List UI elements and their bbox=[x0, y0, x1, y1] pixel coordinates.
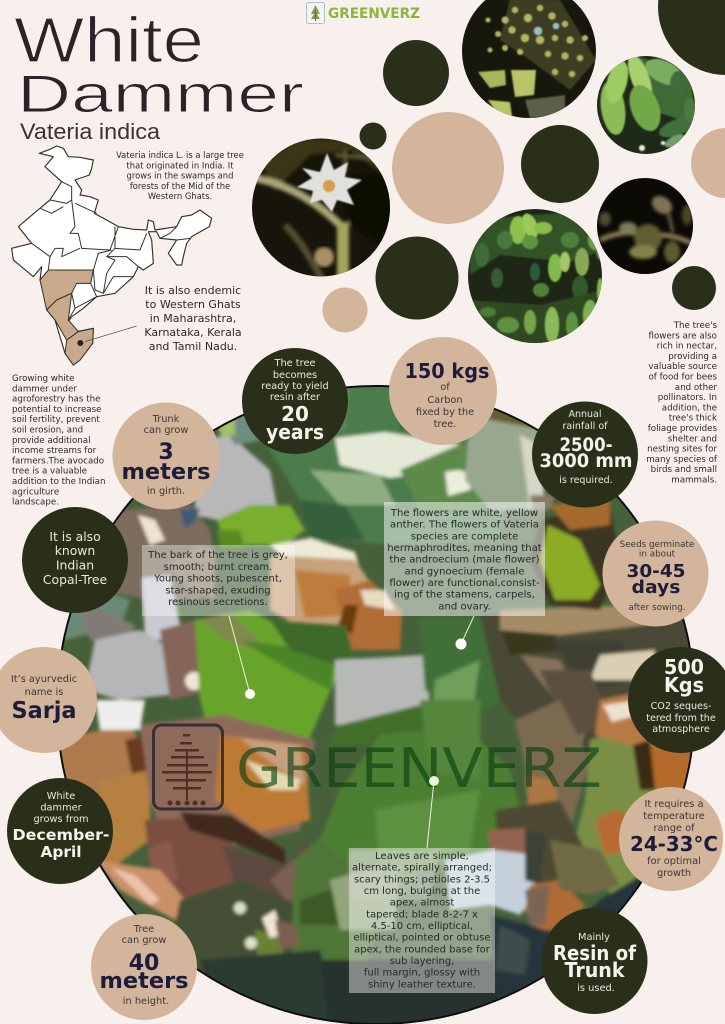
text box: leaves: full margin, glossy with bbox=[364, 968, 480, 979]
callout: flowering season: dammer bbox=[40, 802, 83, 814]
map: location pointer bbox=[77, 326, 137, 346]
watermark logo: tree bbox=[154, 725, 222, 809]
text box: flowers: ing of the stamens, carpels, bbox=[394, 590, 535, 601]
left paragraph: agroforestry has the bbox=[12, 395, 100, 405]
text box: leaves: shiny leather texture. bbox=[368, 979, 476, 990]
callout: Indian Copal-Tree: It is also bbox=[49, 529, 101, 544]
callout: 150 kgs: of bbox=[440, 382, 450, 393]
callout: 3 meters: in girth. bbox=[147, 486, 185, 497]
bright leaf top bbox=[217, 505, 305, 545]
logo: Greenverz bbox=[306, 2, 420, 24]
callout: seeds germinate: days bbox=[632, 577, 680, 598]
right paragraph: birds and small bbox=[651, 465, 717, 475]
text box: bark: resinous secretions. bbox=[168, 597, 268, 608]
text box: flowers: and ovary. bbox=[438, 601, 491, 612]
callout: 500 kgs: atmosphere bbox=[652, 724, 710, 735]
callout: resin of trunk: Resin of bbox=[553, 941, 636, 965]
photo: guava-like leaves bbox=[597, 56, 695, 154]
callout: temperature: growth bbox=[657, 868, 691, 879]
watermark text: GREENVERZ bbox=[236, 737, 602, 800]
intro text: that originated in India. It bbox=[126, 160, 234, 170]
text box: leaves bbox=[349, 776, 495, 993]
callout: Indian Copal-Tree: Copal-Tree bbox=[43, 572, 107, 587]
centre green bbox=[320, 725, 520, 870]
left paragraph: tree is a valuable bbox=[12, 467, 87, 477]
callout: rainfall: rainfall of bbox=[562, 421, 608, 432]
text box: flowers: flower) are functional,consist- bbox=[389, 578, 540, 589]
left paragraph: dammer under bbox=[12, 384, 77, 394]
right paragraph: valuable source bbox=[648, 362, 717, 372]
lower left browns bbox=[61, 728, 138, 796]
callout: temperature bbox=[619, 787, 723, 891]
callout: 40 meters: in height. bbox=[123, 996, 169, 1007]
intro text: forests of the Mid of the bbox=[130, 181, 230, 191]
callout: flowering season: grows from bbox=[33, 814, 89, 825]
right paragraph: pollinators. In bbox=[658, 393, 717, 403]
text box: bark: smooth; burnt cream. bbox=[164, 562, 272, 573]
text box: bark: star-shaped, exuding bbox=[165, 586, 271, 596]
callout: 40 meters: meters bbox=[100, 969, 188, 994]
intro text bbox=[116, 150, 244, 201]
callout: 20 years: ready to yield bbox=[261, 381, 329, 392]
right paragraph: mammals. bbox=[671, 476, 717, 486]
top area bbox=[268, 387, 504, 545]
text box: flowers bbox=[384, 502, 545, 650]
left paragraph: farmers.The avocado bbox=[12, 456, 104, 466]
text box: bark bbox=[142, 545, 295, 699]
left paragraph: potential to increase bbox=[12, 405, 102, 415]
callout: temperature: It requires a bbox=[645, 799, 703, 810]
intro text: Western Ghats. bbox=[148, 191, 212, 201]
right twigs bbox=[480, 615, 689, 754]
right paragraph: rich in nectar, bbox=[657, 342, 717, 352]
endemic note: Karnataka, Kerala bbox=[144, 326, 242, 339]
left paragraph: income streams for bbox=[12, 446, 97, 456]
text box: leaves: 4.5-10 cm, elliptical, bbox=[371, 921, 473, 932]
text box: flowers: The flowers are white, yellow bbox=[390, 508, 538, 519]
cream and brown bbox=[270, 538, 360, 570]
logo: Greenverz: GREENVERZ bbox=[328, 6, 420, 22]
callout: rainfall: is required. bbox=[559, 475, 613, 486]
callout: 3 meters: Trunk bbox=[152, 414, 180, 425]
central left leaf bbox=[193, 609, 337, 740]
right paragraph: addition, the bbox=[662, 403, 717, 413]
text box: leaves: sub layering, bbox=[390, 956, 454, 967]
left paragraph: addition to the Indian bbox=[12, 477, 106, 487]
callout: resin of trunk: Trunk bbox=[564, 958, 625, 982]
subtitle: Vateria indica bbox=[20, 119, 161, 144]
lower-left grey and taupe bbox=[142, 575, 180, 640]
left paragraph: provide additional bbox=[12, 436, 91, 446]
left paragraph: landscape. bbox=[12, 498, 59, 508]
callout: ayurvedic name bbox=[0, 647, 97, 753]
callout: 20 years bbox=[242, 348, 348, 454]
map of India bbox=[12, 146, 212, 365]
text box: leaves: apex, almost bbox=[390, 898, 454, 909]
callout: rainfall: 3000 mm bbox=[540, 450, 632, 472]
left paragraph bbox=[12, 374, 106, 508]
photo: green tree foliage bbox=[466, 207, 604, 345]
callout: seeds germinate bbox=[602, 520, 708, 626]
photo: white flower bbox=[250, 138, 392, 280]
callout: rainfall: 2500- bbox=[560, 434, 612, 456]
bottom dark bbox=[170, 880, 350, 1024]
text box: flowers: species are complete bbox=[411, 531, 518, 542]
callout: resin of trunk: Mainly bbox=[578, 932, 610, 943]
callout: seeds germinate: Seeds germinate bbox=[620, 540, 694, 550]
text box: flowers: anther. The flowers of Vateria bbox=[390, 520, 539, 531]
callout: temperature: range of bbox=[653, 823, 695, 834]
left paragraph: soil fertility, prevent bbox=[12, 415, 100, 425]
intro text: grows in the swamps and bbox=[127, 170, 233, 180]
callout: 40 meters: 40 bbox=[129, 951, 159, 976]
callout: 3 meters: can grow bbox=[144, 425, 188, 436]
callout: 3 meters bbox=[112, 402, 220, 510]
callout: 20 years: becomes bbox=[273, 370, 317, 381]
right paragraph: many species of bbox=[646, 455, 718, 465]
callout: 20 years: 20 bbox=[281, 402, 309, 426]
right paragraph bbox=[646, 321, 718, 486]
text box: leaves: cm long, bulging at the bbox=[364, 886, 480, 897]
right paragraph: and other bbox=[675, 383, 717, 393]
endemic note: and Tamil Nadu. bbox=[149, 340, 237, 353]
callout: temperature: 24-33°C bbox=[630, 832, 718, 856]
left paragraph: soil erosion, and bbox=[12, 426, 83, 436]
callout: 40 meters: can grow bbox=[122, 935, 166, 946]
callout: rainfall bbox=[532, 402, 638, 508]
right paragraph: providing a bbox=[668, 352, 717, 362]
callout: 500 kgs: tered from the bbox=[646, 713, 716, 724]
callout: resin of trunk bbox=[542, 908, 648, 1014]
callout: 500 kgs bbox=[628, 647, 725, 753]
right paragraph: tree's thick bbox=[669, 414, 717, 424]
text box: flowers: and gynoecium (female bbox=[405, 566, 524, 577]
map: highlighted southern states bbox=[40, 270, 93, 365]
text box: flowers: hermaphrodites, meaning that bbox=[387, 543, 542, 554]
title bbox=[14, 4, 304, 124]
callout: Indian Copal-Tree bbox=[22, 507, 128, 613]
endemic note bbox=[144, 284, 242, 353]
callout: ayurvedic name: Sarja bbox=[12, 698, 76, 724]
pointer: flowers bbox=[456, 616, 474, 650]
right paragraph: The tree's bbox=[673, 321, 717, 331]
text box: leaves: apex, the rounded base for bbox=[354, 944, 491, 955]
right lower bbox=[515, 700, 590, 830]
callout: Indian Copal-Tree: known bbox=[55, 543, 95, 558]
callout: Indian Copal-Tree: Indian bbox=[56, 558, 94, 572]
main circular leaf image bbox=[50, 380, 710, 1024]
callout: flowering season bbox=[7, 778, 113, 884]
callout: temperature: for optimal bbox=[647, 856, 701, 867]
left paragraph: agriculture bbox=[12, 487, 59, 497]
text box: leaves: scary things; petioles 2-3.5 bbox=[354, 874, 490, 885]
photo: sunlit foliage bbox=[460, 0, 600, 122]
pointer: leaves bbox=[427, 776, 439, 848]
right lime & brown bbox=[530, 505, 620, 610]
callout: 40 meters: Tree bbox=[133, 924, 154, 935]
right paragraph: foliage provides bbox=[648, 424, 717, 434]
intro text: Vateria indica L. is a large tree bbox=[116, 150, 244, 160]
grey upper left bbox=[195, 435, 278, 525]
callout: resin of trunk: is used. bbox=[577, 983, 615, 994]
title: White bbox=[14, 4, 204, 76]
callout: 500 kgs: CO2 seques- bbox=[651, 701, 711, 712]
endemic note: to Western Ghats bbox=[145, 298, 241, 311]
title: Dammer bbox=[17, 65, 304, 124]
callout: flowering season: White bbox=[47, 791, 75, 802]
text box: leaves: tapered; blade 8-2-7 x bbox=[366, 909, 478, 920]
text box: leaves: alternate, spirally arranged; bbox=[352, 863, 492, 874]
endemic note: It is also endemic bbox=[145, 284, 241, 297]
callout: 20 years: resin after bbox=[270, 392, 321, 403]
callout: 150 kgs: fixed by the bbox=[416, 407, 474, 418]
callout: 40 meters bbox=[91, 914, 197, 1020]
endemic note: in Maharashtra, bbox=[150, 312, 236, 325]
callout: 3 meters: meters bbox=[122, 460, 210, 485]
pointer: bark bbox=[229, 616, 255, 699]
callout: seeds germinate: 30-45 bbox=[626, 561, 686, 582]
callout: 20 years: years bbox=[266, 420, 324, 444]
callout: seeds germinate: in about bbox=[639, 550, 676, 560]
photo: flower buds bbox=[595, 176, 697, 276]
callout: 3 meters: 3 bbox=[158, 440, 174, 465]
callout: 500 kgs: Kgs bbox=[664, 673, 704, 697]
callout: flowering season: April bbox=[40, 843, 82, 861]
text box: flowers: the androecium (male flower) bbox=[389, 555, 540, 566]
text box: bark: The bark of the tree is grey, bbox=[147, 550, 288, 561]
decorative circle cluster bbox=[322, 0, 725, 332]
right paragraph: of food for bees bbox=[648, 372, 717, 382]
text box: leaves: Leaves are simple, bbox=[375, 851, 469, 862]
text box: leaves: elliptical, pointed or obtuse bbox=[354, 933, 490, 944]
callout: 20 years: The tree bbox=[273, 358, 316, 369]
callout: ayurvedic name: It’s ayurvedic bbox=[11, 674, 77, 685]
callout: seeds germinate: after sowing. bbox=[628, 603, 686, 613]
text box: bark: Young shoots, pubescent, bbox=[153, 574, 282, 584]
callout: ayurvedic name: name is bbox=[25, 687, 63, 698]
callout: 150 kgs: 150 kgs bbox=[404, 359, 490, 383]
callout: 150 kgs: tree. bbox=[434, 419, 456, 430]
callout: flowering season: December- bbox=[12, 826, 109, 844]
callout: 500 kgs: 500 bbox=[664, 655, 704, 679]
right paragraph: shelter and bbox=[668, 434, 717, 444]
callout: temperature: temperature bbox=[643, 811, 705, 822]
left paragraph: Growing white bbox=[12, 374, 75, 384]
right paragraph: nesting sites for bbox=[647, 445, 717, 455]
right paragraph: flowers are also bbox=[648, 331, 717, 341]
callout: 150 kgs bbox=[389, 337, 497, 445]
callout: 150 kgs: Carbon bbox=[427, 395, 463, 406]
callout: rainfall: Annual bbox=[568, 409, 602, 420]
